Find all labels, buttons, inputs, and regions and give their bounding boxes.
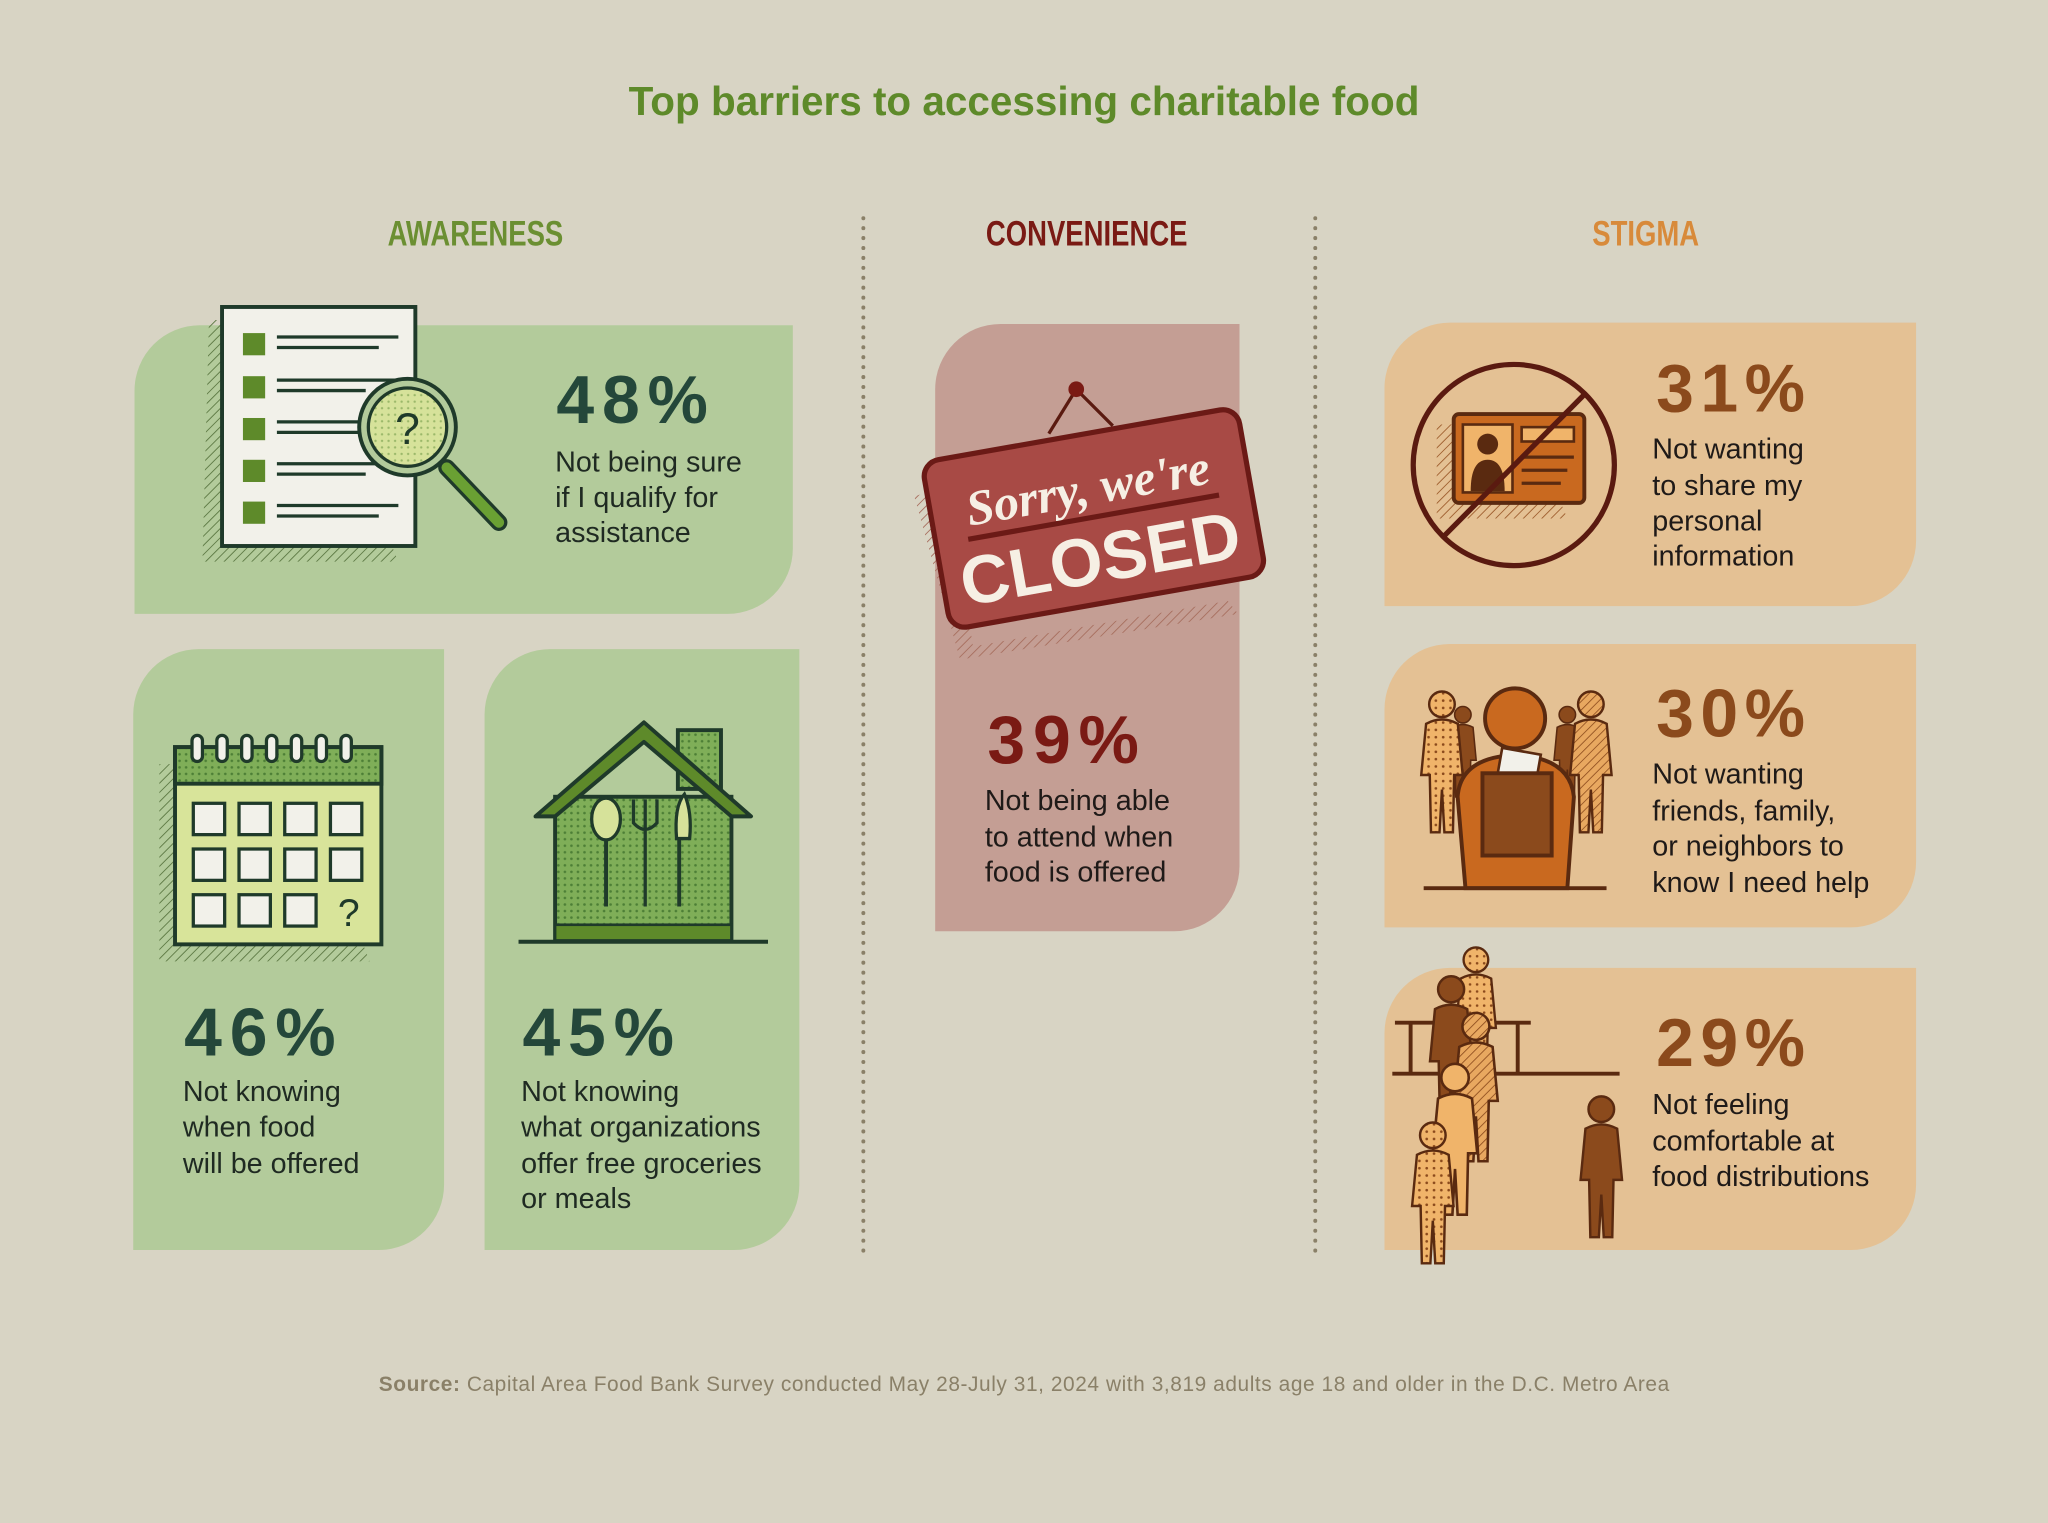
- text: 39% description: Not being able: [985, 785, 1170, 817]
- text: 29% description: food distributions: [1652, 1161, 1869, 1193]
- text: 45% description: or meals: [521, 1183, 631, 1215]
- stat: 31%: 31%: [1656, 351, 1805, 426]
- text: 31% description: to share my: [1652, 470, 1803, 502]
- text: 31% description: Not wanting: [1652, 433, 1804, 465]
- text: 48% description: assistance: [555, 517, 691, 549]
- icon: queue of people: [1392, 947, 1622, 1263]
- text: 30% description: know I need help: [1652, 867, 1869, 899]
- stat: 45%: 45%: [522, 995, 674, 1070]
- text: 48% description: if I qualify for: [555, 482, 718, 514]
- icon: calendar: [159, 735, 381, 961]
- text: 45% description: what organizations: [520, 1111, 761, 1143]
- text: 31% description: information: [1652, 541, 1794, 573]
- text: 29% description: Not feeling: [1652, 1089, 1790, 1121]
- text: 46% description: will be offered: [182, 1148, 360, 1180]
- icon: closed sign: Sorry, we're: [962, 440, 1214, 537]
- panel: awareness 46%: [133, 649, 444, 1250]
- title: Top barriers to accessing charitable food: [629, 78, 1419, 124]
- text: 39% description: food is offered: [985, 857, 1166, 889]
- stat: 48%: 48%: [556, 363, 708, 438]
- icon: crowd with bag: [1421, 688, 1612, 888]
- panel: awareness 45%: [485, 649, 799, 1250]
- icon: closed sign: [914, 381, 1266, 660]
- heading: awareness: AWARENESS: [388, 213, 563, 253]
- text: 46% description: Not knowing: [183, 1076, 341, 1108]
- text: 29% description: comfortable at: [1652, 1126, 1834, 1158]
- text: 30% description: or neighbors to: [1652, 831, 1844, 863]
- panel: awareness 48%: [135, 307, 793, 614]
- heading: convenience: CONVENIENCE: [986, 213, 1188, 253]
- stat: 30%: 30%: [1656, 677, 1805, 752]
- icon: calendar: ?: [338, 892, 360, 935]
- text: 30% description: Not wanting: [1652, 759, 1804, 791]
- text: 45% description: Not knowing: [521, 1076, 679, 1108]
- text: 45% description: offer free groceries: [521, 1148, 762, 1180]
- stat: 46%: 46%: [184, 995, 336, 1070]
- stat: 29%: 29%: [1656, 1006, 1805, 1081]
- icon: checklist with magnifier: [202, 307, 499, 562]
- icon: no personal ID: [1413, 364, 1614, 566]
- panel: convenience 39%: [914, 324, 1266, 931]
- text: 30% description: friends, family,: [1652, 795, 1835, 827]
- source note: Source: Capital Area Food Bank Survey conducted May 28-July 31, 2024 with 3,819 adults age 18 and older in the D.C. Metro Area: [379, 1373, 1670, 1396]
- stat: 39%: 39%: [987, 703, 1139, 778]
- icon: checklist with magnifier: ?: [395, 405, 420, 454]
- text: 48% description: Not being sure: [555, 447, 742, 479]
- text: 39% description: to attend when: [985, 821, 1173, 853]
- text: 46% description: when food: [182, 1111, 315, 1143]
- heading: stigma: STIGMA: [1592, 213, 1699, 253]
- panel: stigma 30%: [1384, 644, 1916, 927]
- panel: stigma 31%: [1384, 323, 1916, 606]
- panel: stigma 29%: [1384, 947, 1916, 1263]
- icon: closed sign: CLOSED: [955, 498, 1246, 621]
- icon: house with utensils: [519, 722, 768, 942]
- text: 31% description: personal: [1652, 505, 1762, 537]
